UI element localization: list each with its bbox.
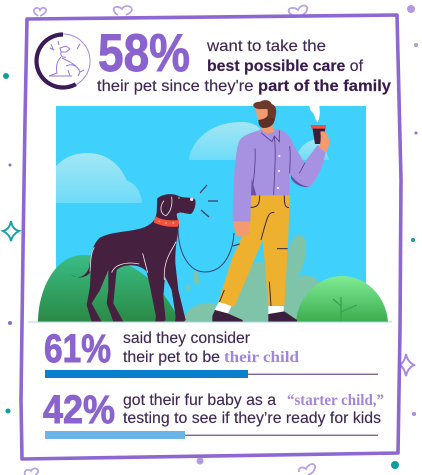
socks bbox=[214, 302, 284, 315]
shirt bbox=[233, 129, 326, 222]
stat: 61%: 61% bbox=[44, 327, 111, 371]
collar bbox=[154, 216, 179, 227]
stat text: their child: their pet to be bbox=[123, 349, 220, 366]
smoke bbox=[309, 106, 320, 122]
man bbox=[212, 100, 329, 322]
stat text: their child: their child bbox=[224, 349, 299, 366]
stat text: starter child: “starter child,” bbox=[287, 392, 384, 409]
beard bbox=[258, 113, 275, 128]
dog bbox=[71, 194, 196, 322]
bark lines bbox=[200, 185, 218, 217]
trousers bbox=[218, 194, 290, 307]
back bushes bbox=[183, 235, 330, 322]
stat text: starter child: got their fur baby as a bbox=[123, 392, 276, 409]
hand on leash bbox=[233, 221, 250, 237]
stat text: their child bbox=[123, 330, 299, 366]
headline text: want to take the bbox=[206, 38, 326, 55]
stat: 42%: 42% bbox=[43, 388, 115, 432]
illustration: man walking dog bbox=[28, 100, 392, 322]
shoes bbox=[212, 310, 297, 322]
sky bbox=[56, 106, 366, 322]
headline text: best possible care of bbox=[207, 58, 364, 75]
headline stat: 58%: 58% bbox=[98, 24, 190, 83]
cup bbox=[312, 127, 326, 144]
stat text: starter child: testing to see if they’re ready for kids bbox=[123, 410, 381, 427]
neck and face bbox=[256, 107, 275, 134]
icon: progress ring with person and dog bbox=[36, 34, 90, 88]
decorative sparkles bbox=[3, 221, 414, 376]
decorative hearts bbox=[25, 5, 315, 475]
left hill bbox=[38, 255, 180, 322]
hand on cup bbox=[319, 131, 329, 152]
progress bar: 61% bbox=[45, 370, 378, 378]
progress bar: 42% bbox=[45, 431, 378, 439]
stat text: starter child bbox=[123, 392, 384, 427]
hair bbox=[253, 100, 276, 118]
stat text: their child: said they consider bbox=[123, 330, 251, 347]
right bush bbox=[296, 276, 388, 322]
leash bbox=[178, 227, 234, 272]
headline text bbox=[97, 38, 391, 95]
headline text: their pet since they're part of the family bbox=[97, 78, 391, 95]
ground line bbox=[28, 321, 392, 323]
clouds bbox=[56, 122, 329, 203]
